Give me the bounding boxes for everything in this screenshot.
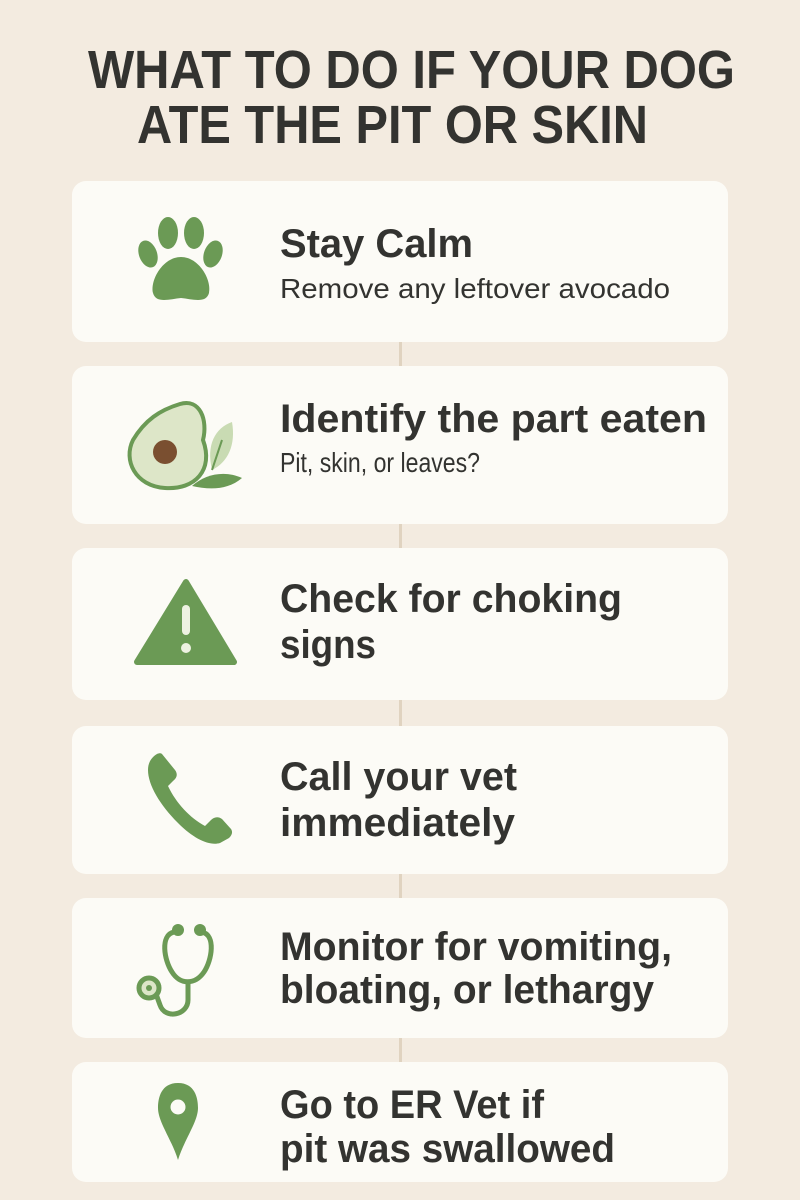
heading — [280, 577, 622, 667]
panel: choking — [72, 548, 728, 700]
heading: Identify the part eaten — [280, 397, 707, 441]
heading — [280, 755, 517, 845]
heading — [280, 1083, 615, 1171]
panel: identify — [72, 366, 728, 524]
icon: pin — [158, 1083, 198, 1160]
heading: Check for choking — [280, 577, 622, 621]
title: ATE THE PIT OR SKIN — [137, 95, 648, 155]
panel: ER vet — [72, 1062, 728, 1182]
heading: bloating, or lethargy — [280, 968, 655, 1012]
heading: Stay Calm — [280, 222, 473, 266]
text: Pit, skin, or leaves? — [280, 447, 480, 478]
heading: Call your vet — [280, 755, 517, 799]
heading — [280, 925, 672, 1012]
title — [88, 40, 735, 155]
icon: phone — [148, 753, 232, 844]
icon: avocado — [130, 403, 242, 488]
icon: stethoscope — [139, 932, 211, 1014]
panel: monitor — [72, 898, 728, 1038]
heading: Go to ER Vet if — [280, 1083, 545, 1127]
heading: immediately — [280, 801, 516, 845]
title: WHAT TO DO IF YOUR DOG — [88, 40, 735, 100]
panel: stay calm — [72, 181, 728, 342]
icon: warning — [137, 582, 234, 662]
heading: Monitor for vomiting, — [280, 925, 672, 969]
heading: signs — [280, 623, 376, 667]
icon: paw — [135, 217, 226, 300]
text: Remove any leftover avocado — [280, 273, 670, 304]
panel: call vet — [72, 726, 728, 874]
heading: pit was swallowed — [280, 1127, 615, 1171]
